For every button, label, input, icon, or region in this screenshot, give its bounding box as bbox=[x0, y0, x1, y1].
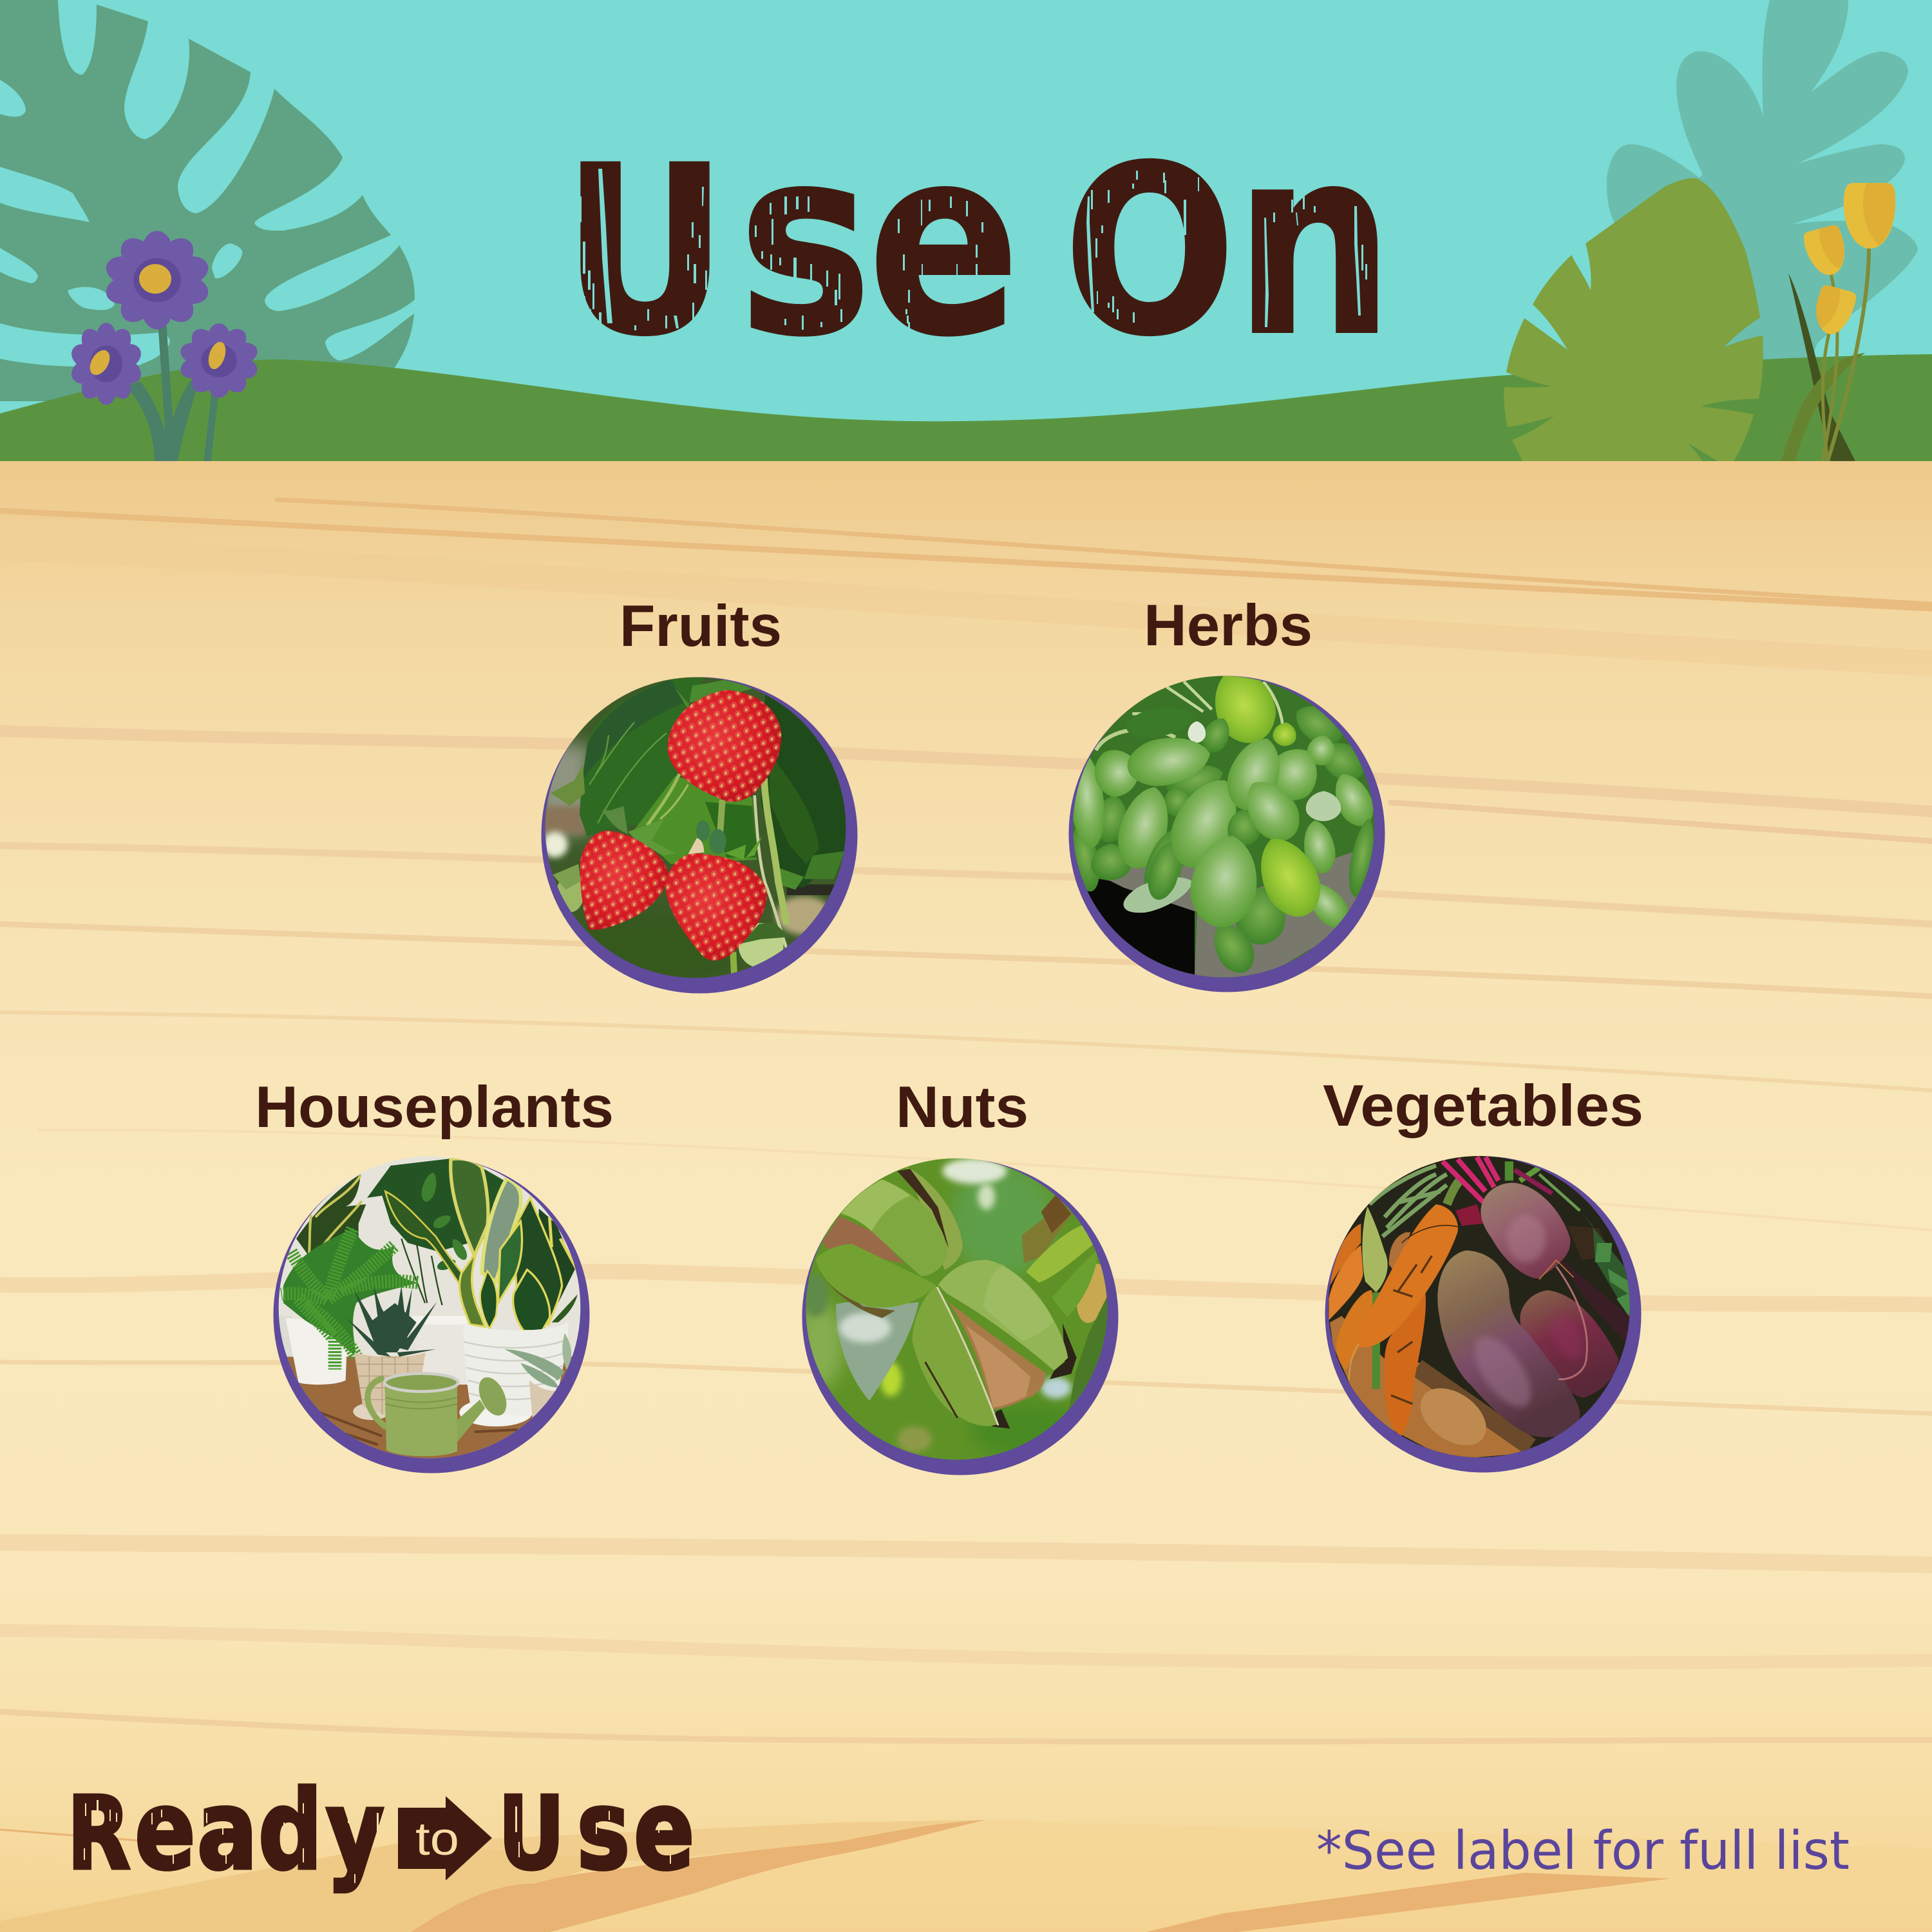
photo: pecans bbox=[797, 1156, 1121, 1478]
logo distress texture bbox=[84, 1800, 671, 1883]
purple ring bbox=[541, 677, 858, 993]
small patterned plant bbox=[529, 1380, 558, 1418]
beets bbox=[1520, 1290, 1618, 1397]
logo arrow bbox=[398, 1796, 492, 1880]
far left pot bbox=[279, 1316, 292, 1357]
title: O bbox=[1064, 117, 1235, 386]
photo: root vegetables bbox=[1320, 1153, 1642, 1475]
left snake plant bbox=[296, 1174, 366, 1262]
category: Herbs bbox=[1066, 593, 1388, 995]
logo: Ready to Use bbox=[67, 1767, 695, 1894]
purple ring bbox=[1069, 676, 1385, 992]
carrots bbox=[1330, 1224, 1361, 1286]
watering can bbox=[368, 1378, 386, 1428]
flowers: purple daisies bbox=[69, 231, 260, 461]
label: Herbs: Herbs bbox=[1144, 593, 1312, 658]
purple ring bbox=[273, 1157, 590, 1473]
logo arrow text: to bbox=[415, 1814, 459, 1865]
fern bbox=[281, 1228, 419, 1370]
logo wordmark: se bbox=[576, 1767, 695, 1894]
title distress texture bbox=[580, 169, 1367, 332]
category: Houseplants bbox=[255, 1075, 614, 1475]
logo wordmark: R bbox=[67, 1776, 131, 1892]
back white pot bbox=[422, 1356, 468, 1385]
purple ring bbox=[1325, 1157, 1641, 1472]
label: Fruits: Fruits bbox=[620, 594, 782, 659]
photo: basil bbox=[1073, 676, 1374, 978]
wood grain bbox=[0, 500, 1932, 1841]
background plant bbox=[1607, 0, 1918, 412]
wood bottom wedges bbox=[0, 1820, 1932, 1932]
purple ring bbox=[802, 1159, 1118, 1475]
category: Vegetables bbox=[1320, 1074, 1643, 1475]
photo: strawberries bbox=[545, 677, 846, 978]
big green leaf bbox=[1504, 178, 1763, 461]
footnote: *See label for full list bbox=[1316, 1821, 1850, 1882]
wood background bbox=[0, 461, 1932, 1932]
monstera leaf bbox=[0, 0, 415, 425]
category: Fruits bbox=[538, 594, 860, 995]
label: Houseplants: Houseplants bbox=[255, 1075, 614, 1140]
saucer bbox=[459, 1403, 532, 1426]
title: n bbox=[1235, 93, 1394, 393]
category: Nuts bbox=[797, 1075, 1121, 1478]
big snake plant bbox=[451, 1159, 488, 1256]
hill bbox=[0, 354, 1932, 464]
wicker pot bbox=[353, 1403, 390, 1420]
left white pot bbox=[285, 1318, 348, 1385]
title: se bbox=[739, 93, 1020, 393]
label: Vegetables: Vegetables bbox=[1323, 1074, 1643, 1139]
tulips bbox=[1781, 183, 1895, 461]
photo: potted plants bbox=[278, 1157, 581, 1458]
logo wordmark: U bbox=[498, 1776, 565, 1892]
big white pot bbox=[463, 1322, 569, 1416]
background: sky bbox=[0, 0, 1932, 464]
logo wordmark: eady bbox=[135, 1767, 384, 1894]
label: Nuts: Nuts bbox=[896, 1075, 1028, 1140]
title: U bbox=[563, 117, 727, 386]
aloe bbox=[346, 1286, 437, 1357]
